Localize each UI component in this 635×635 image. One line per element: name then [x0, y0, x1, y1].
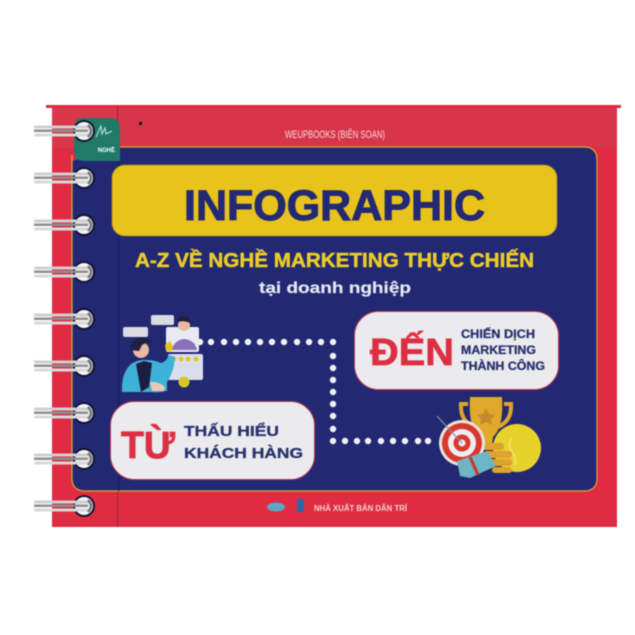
pill text: MARKETING	[461, 343, 536, 357]
spiral binding	[34, 120, 95, 517]
small black speck	[139, 122, 142, 125]
dotted connector	[197, 339, 431, 444]
title: INFOGRAPHIC	[184, 182, 485, 230]
pill text	[184, 422, 303, 462]
pill text: CHIẾN DỊCH	[461, 326, 535, 341]
footer logos	[267, 499, 304, 512]
pill heading: ĐẾN: ĐẾN	[370, 330, 454, 374]
book cover	[46, 105, 621, 527]
pill text: KHÁCH HÀNG	[184, 445, 303, 462]
illustration: trophy, target, money	[437, 397, 541, 478]
author line: WEUPBOOKS (BIÊN SOẠN)	[285, 128, 385, 141]
subtitle second line: tại doanh nghiệp	[259, 280, 411, 297]
navy cover panel	[72, 147, 597, 491]
pill text: THẤU HIỂU	[184, 422, 279, 440]
yellow title box	[112, 165, 557, 236]
tab text: Nghề: NGHỀ	[98, 147, 115, 154]
publisher name: NHÀ XUẤT BẢN DÂN TRÍ	[314, 503, 408, 513]
pill heading: TỪ: TỪ	[121, 423, 175, 467]
publisher tab	[74, 118, 120, 161]
pill: TỪ	[110, 402, 314, 480]
subtitle: A-Z VỀ NGHỀ MARKETING THỰC CHIẾN	[135, 249, 534, 272]
pill text: THÀNH CÔNG	[461, 358, 545, 373]
pill: ĐẾN	[354, 312, 558, 390]
pill text	[461, 326, 545, 373]
illustration: customer insight	[122, 315, 203, 392]
